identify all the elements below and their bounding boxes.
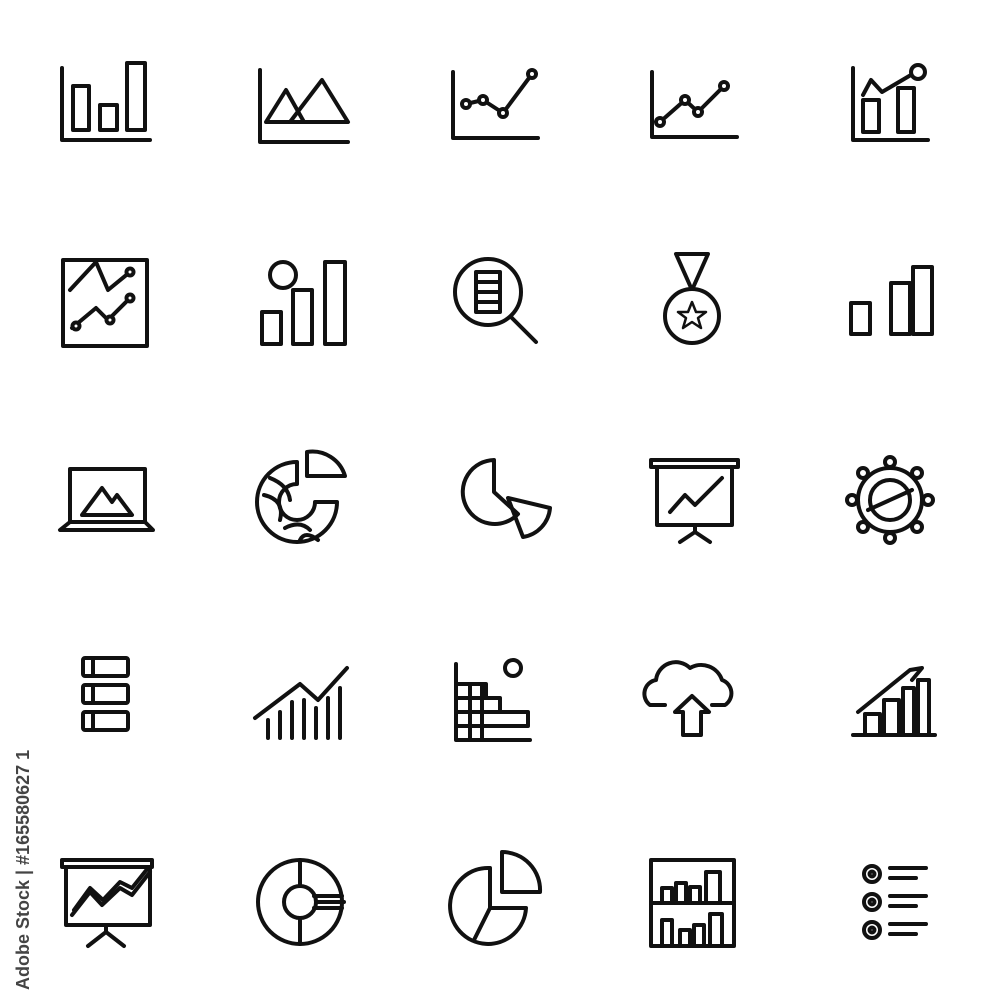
icon: network circle [847,457,933,543]
watermark text: Adobe Stock | #165580627 1 [13,750,33,990]
icon: mountain chart [260,70,348,142]
icon: framed line chart [63,260,147,346]
icon: bars with trend arrow [853,668,935,735]
icon: pie chart [463,460,550,537]
icon: horizontal bars chart [456,660,530,740]
icon: line chart [453,70,538,138]
icon: list [864,866,926,938]
icon: bars with arrow [853,65,928,140]
icon: board with chart [62,860,152,946]
icon: bars with circle [262,262,345,344]
icon: line chart 2 [652,72,737,137]
icon: growth bars [851,267,932,334]
icon: pie chart 2 [450,852,540,944]
icon: cloud upload [644,662,731,735]
icon: donut chart 2 [258,860,344,944]
icon: bar chart [62,63,150,140]
icon: bar shelves [651,860,734,946]
icon: donut chart [257,452,345,542]
icon: presentation board [651,460,738,542]
icon: magnifier with list [455,259,536,342]
icon: laptop [60,469,153,530]
icon: medal [665,254,719,343]
icon: stacked blocks [83,658,128,730]
icon: growth line bars [255,668,347,738]
